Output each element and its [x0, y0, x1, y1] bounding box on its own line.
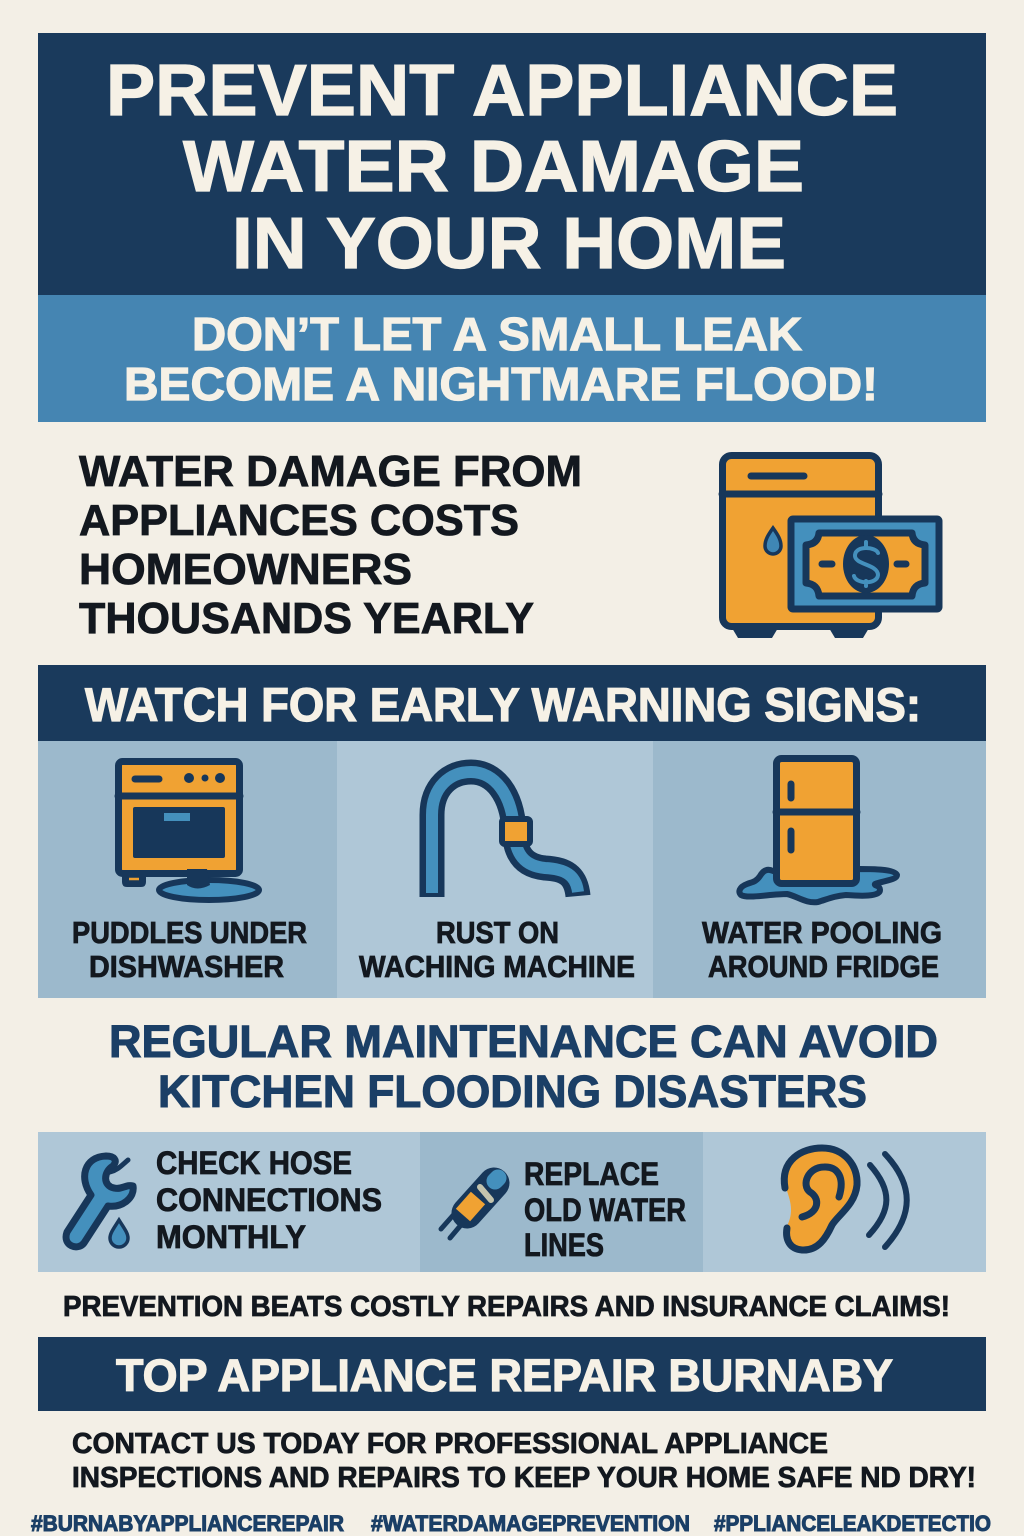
panel: check hose connections: MONTHLY: [156, 1219, 306, 1255]
maintenance heading: [109, 1016, 938, 1117]
title banner: WATER DAMAGE: [183, 127, 804, 207]
prevention statement: PREVENTION BEATS COSTLY REPAIRS AND INSURANCE CLAIMS!: [63, 1291, 950, 1323]
panel: replace old water lines: [420, 1132, 703, 1272]
panel: puddles under dishwasher: DISHWASHER: [89, 949, 284, 984]
panel: replace old water lines: OLD WATER: [524, 1192, 686, 1228]
icon: fridge with puddle: [739, 758, 897, 902]
icon: appliance with money: [722, 456, 939, 638]
panel: rust on washing machine: RUST ON: [436, 915, 559, 950]
panel: check hose connections: CONNECTIONS: [156, 1182, 382, 1218]
panel: check hose connections: CHECK HOSE: [156, 1145, 352, 1181]
call to action: CONTACT US TODAY FOR PROFESSIONAL APPLIANCE: [72, 1428, 828, 1460]
maintenance heading: KITCHEN FLOODING DISASTERS: [158, 1066, 867, 1117]
panel: puddles under dishwasher: PUDDLES UNDER: [72, 915, 307, 950]
icon: ear with sound waves: [784, 1148, 907, 1250]
maintenance heading: REGULAR MAINTENANCE CAN AVOID: [109, 1016, 938, 1067]
subtitle banner: DON’T LET A SMALL LEAK: [192, 308, 802, 360]
cost statement: [79, 447, 582, 643]
panel: puddles under dishwasher: [38, 741, 337, 998]
title banner: IN YOUR HOME: [232, 204, 786, 284]
panel: replace old water lines: REPLACE: [524, 1156, 659, 1192]
cost statement: HOMEOWNERS: [79, 545, 412, 594]
cost statement: WATER DAMAGE FROM: [79, 447, 582, 496]
warning signs header: [38, 665, 986, 741]
icon: hose: [432, 772, 578, 897]
panel: water pooling around fridge: WATER POOLING: [702, 915, 942, 950]
hashtags: [31, 1511, 991, 1536]
panel: rust on washing machine: WACHING MACHINE: [359, 949, 635, 984]
title banner: PREVENT APPLIANCE: [106, 51, 898, 131]
call to action: [72, 1428, 976, 1494]
icon: water line connector: [441, 1178, 498, 1238]
business name banner: TOP APPLIANCE REPAIR BURNABY: [116, 1350, 893, 1401]
subtitle banner: [38, 295, 986, 422]
panel: replace old water lines: LINES: [524, 1227, 604, 1263]
icon: wrench with drop: [66, 1156, 133, 1247]
warning signs header: WATCH FOR EARLY WARNING SIGNS:: [85, 678, 921, 731]
cost statement: APPLIANCES COSTS: [79, 496, 519, 545]
call to action: INSPECTIONS AND REPAIRS TO KEEP YOUR HOME SAFE ND DRY!: [72, 1462, 976, 1494]
hashtags: #PPLIANCELEAKDETECTIO: [714, 1511, 991, 1536]
subtitle banner: BECOME A NIGHTMARE FLOOD!: [124, 358, 878, 410]
icon: dishwasher with puddle: [118, 762, 259, 900]
panel: check hose connections: [38, 1132, 420, 1272]
cost statement: THOUSANDS YEARLY: [79, 594, 534, 643]
panel: water pooling around fridge: [653, 741, 986, 998]
hashtags: #WATERDAMAGEPREVENTION: [371, 1511, 690, 1536]
panel: rust on washing machine: [337, 741, 653, 998]
title banner: [38, 33, 986, 295]
panel: water pooling around fridge: AROUND FRIDGE: [708, 949, 939, 984]
hashtags: #BURNABYAPPLIANCEREPAIR: [31, 1511, 344, 1536]
panel: listen for leaks: [703, 1132, 986, 1272]
business name banner: [38, 1337, 986, 1411]
